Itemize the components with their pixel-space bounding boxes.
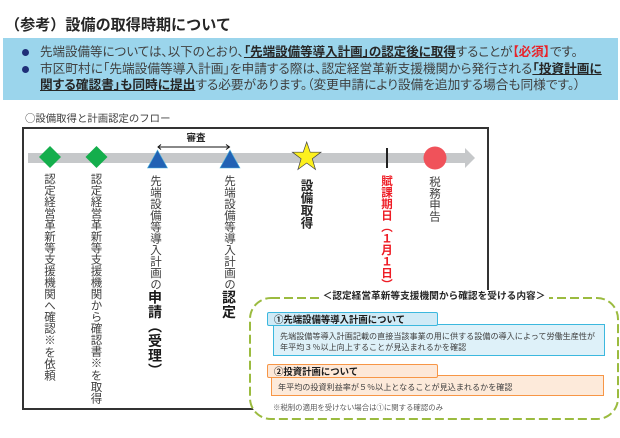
bullet: first point	[22, 49, 29, 56]
text: second point line 2: 関する確認書」も同時に提出する必要があります。（変更申請により設備を追加する場合も同様です。）	[40, 78, 580, 92]
icon: star, equipment acquisition	[292, 142, 321, 170]
label: step 6: 賦課期日（１月１日）	[380, 175, 392, 290]
header: investment plan: ②投資計画について	[274, 364, 358, 378]
label: step 7: 税務申告	[428, 176, 440, 222]
bullet: second point	[22, 66, 29, 73]
footnote: ※税制の適用を受けない場合は①に関する確認のみ	[273, 402, 443, 413]
text: second point line 1: 市区町村に「先端設備等導入計画」を申請する際は、認定経営革新支援機関から発行される「投資計画に	[40, 62, 602, 76]
header: plan confirmation: ①先端設備等導入計画について	[274, 312, 405, 326]
timeline arrow	[28, 148, 475, 168]
label: step 1: 認定経営革新等支援機関へ確認※ を依頼	[43, 173, 55, 381]
icon: circle, tax return	[424, 146, 446, 170]
body: investment plan	[271, 375, 604, 396]
label: step 5: 設備取得	[298, 179, 312, 229]
tick: tax assessment date	[386, 148, 388, 168]
body: plan confirmation: 先端設備等導入計画記載の直接当該事業の用に供する設備の導入によって労働生産性が	[280, 332, 595, 341]
icon: triangle, application	[148, 150, 168, 168]
arrow: review period	[158, 144, 230, 150]
header: investment plan	[267, 364, 438, 378]
text: first point: 先端設備等については、以下のとおり、「先端設備等導入計画」の認定後に取得することが【必須】です。	[40, 45, 578, 59]
body: plan confirmation	[273, 324, 605, 356]
body: investment plan: 年平均の投資利益率が５％以上となることが見込まれるかを確認	[278, 383, 512, 392]
panel: flow frame	[22, 127, 489, 410]
heading: confirmation contents: ＜認定経営革新等支援機関から確認を受ける内容＞	[323, 291, 545, 302]
label: step 3: 先端設備等導入計画の 申請（受理）	[147, 175, 163, 378]
icon: diamond, confirmation request	[39, 146, 61, 168]
panel: key points	[3, 38, 618, 100]
flow heading: ○設備取得と計画認定のフロー	[25, 110, 170, 125]
panel: confirmation contents	[249, 297, 619, 420]
icon: diamond, certificate received	[86, 146, 108, 168]
label: step 2: 認定経営革新等支援機関から確認書※ を取得	[90, 173, 102, 404]
icon: triangle, approval	[220, 150, 240, 168]
title: （参考）設備の取得時期について	[5, 17, 231, 34]
label: review: 審査	[186, 133, 206, 144]
body: plan confirmation: 年平均３％以上向上することが見込まれるかを確認	[280, 343, 466, 352]
label: step 4: 先端設備等導入計画の 認定	[221, 175, 237, 319]
